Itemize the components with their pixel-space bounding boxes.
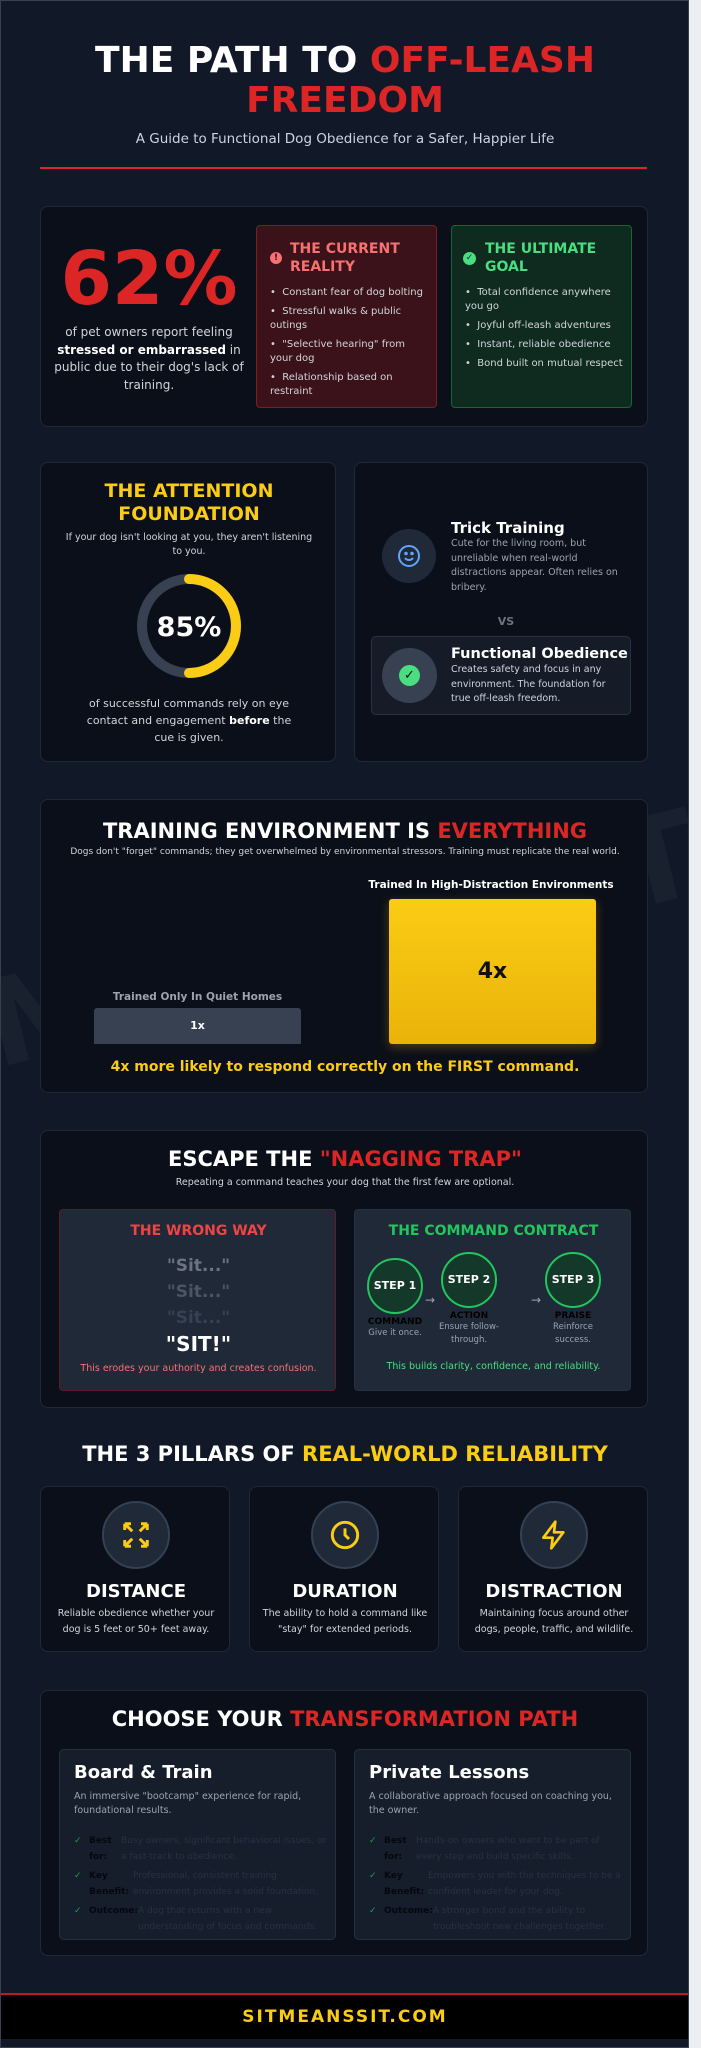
list: • Relationship based on restraint	[270, 372, 393, 397]
heading: THE CURRENT	[290, 241, 400, 257]
step 3: PRAISE	[555, 1311, 591, 1321]
list: A dog that returns with a new understanding of focus and commands.	[138, 1906, 317, 1932]
list: ✓	[74, 1906, 82, 1916]
trick training text: Cute for the living room, but unreliable when real-world distractions appear. Often relies on bribery.	[451, 538, 618, 592]
arrow: →	[531, 1293, 541, 1307]
stat description: of pet owners report feeling stressed or embarrassed in public due to their dog's lack of training.	[54, 325, 244, 392]
list: Key Benefit:	[89, 1871, 129, 1896]
list	[270, 287, 423, 397]
list: Outcome:	[384, 1906, 433, 1916]
chart: 85% ring: 85%	[157, 612, 221, 643]
caption: of successful commands rely on eye contact and engagement before the cue is given.	[87, 697, 291, 744]
list: • Stressful walks & public outings	[270, 306, 401, 331]
icon: alert	[270, 252, 282, 264]
list: • Total confidence anywhere you go	[465, 287, 611, 312]
box: command contract	[354, 1209, 631, 1391]
step 1: Give it once.	[368, 1328, 422, 1338]
panel: pillar distance	[40, 1486, 230, 1652]
box: ultimate goal	[451, 225, 632, 408]
list: ✓	[369, 1871, 377, 1881]
card: private lessons: Private Lessons	[369, 1762, 529, 1783]
list: Outcome:	[89, 1906, 138, 1916]
title: DURATION	[292, 1581, 398, 1602]
title: DISTRACTION	[485, 1581, 623, 1602]
box: current reality	[256, 225, 437, 408]
box: wrong way	[59, 1209, 336, 1391]
desc: The ability to hold a command like "stay" for extended periods.	[263, 1608, 427, 1635]
icon: check	[463, 252, 476, 265]
step 3: STEP 3	[552, 1273, 594, 1286]
panel: nagging trap	[40, 1130, 648, 1408]
list: ✓	[369, 1906, 377, 1916]
subtitle: A Guide to Functional Dog Obedience for a Safer, Happier Life	[136, 131, 554, 147]
list: ✓	[74, 1836, 82, 1846]
chart: 85% ring	[137, 574, 241, 678]
card: board & train	[59, 1749, 336, 1940]
functional text	[451, 646, 628, 704]
list: • Instant, reliable obedience	[465, 339, 610, 350]
subtext: If your dog isn't looking at you, they aren't listening to you.	[66, 532, 312, 557]
arrow: →	[425, 1293, 435, 1307]
list: • Joyful off-leash adventures	[465, 320, 611, 331]
step 3: Reinforce success.	[553, 1322, 593, 1345]
footer text: This builds clarity, confidence, and reliability.	[387, 1361, 600, 1372]
card: private lessons	[354, 1749, 631, 1940]
heading: THE ULTIMATE	[485, 241, 596, 257]
bar: 1x	[94, 1008, 301, 1044]
step 2	[439, 1252, 499, 1345]
repeated sits: "Sit..."	[167, 1282, 230, 1302]
step 1: COMMAND	[368, 1317, 422, 1327]
label: high distraction: Trained In High-Distraction Environments	[368, 879, 614, 891]
heading: REALITY	[290, 259, 355, 275]
title: THE PATH TO OFF-LEASH	[95, 40, 595, 81]
vs: VS	[498, 615, 514, 628]
desc: Maintaining focus around other dogs, people, traffic, and wildlife.	[475, 1608, 633, 1635]
step 2: Ensure follow-through.	[439, 1322, 499, 1345]
heading: GOAL	[485, 259, 528, 275]
bar: 4x	[389, 899, 596, 1044]
heading: CHOOSE YOUR TRANSFORMATION PATH	[112, 1707, 578, 1731]
panel: training environment	[40, 799, 648, 1093]
list	[74, 1836, 326, 1932]
icon: smiley	[382, 529, 436, 583]
panel: transformation path	[40, 1690, 648, 1956]
bar: 4x: 4x	[478, 959, 507, 984]
list: ✓	[369, 1836, 377, 1846]
list: • Constant fear of dog bolting	[270, 287, 423, 298]
heading: FOUNDATION	[118, 503, 260, 525]
heading: THE WRONG WAY	[130, 1223, 267, 1239]
list: Professional, consistent training environment provides a solid foundation.	[133, 1871, 318, 1896]
step 1	[367, 1258, 423, 1338]
panel: statistic	[40, 206, 648, 427]
trick training text: Trick Training	[451, 519, 565, 537]
title: DISTANCE	[86, 1581, 186, 1602]
list	[369, 1836, 621, 1932]
bar chart	[94, 879, 614, 1052]
list	[465, 287, 623, 369]
repeated sits	[166, 1256, 231, 1356]
label: quiet homes: Trained Only In Quiet Homes	[113, 991, 282, 1003]
heading	[104, 480, 274, 525]
list: • "Selective hearing" from your dog	[270, 339, 405, 364]
icon: bolt	[520, 1501, 588, 1569]
icon: check: ✓	[466, 253, 473, 263]
step 2: ACTION	[450, 1311, 488, 1321]
functional text: Functional Obedience	[451, 646, 628, 662]
card: board & train: An immersive "bootcamp" experience for rapid, foundational results.	[74, 1791, 301, 1816]
list: Best for:	[89, 1836, 112, 1862]
panel: attention foundation	[40, 462, 336, 762]
list: • Bond built on mutual respect	[465, 358, 623, 369]
heading: ESCAPE THE "NAGGING TRAP"	[168, 1147, 522, 1171]
card: board & train: Board & Train	[74, 1762, 213, 1783]
card: private lessons: A collaborative approach focused on coaching you, the owner.	[369, 1791, 612, 1816]
list: Empowers you with the techniques to be a confident leader for your dog.	[428, 1871, 621, 1896]
box: functional obedience	[371, 636, 631, 715]
icon: arrows	[102, 1501, 170, 1569]
panel: trick vs functional	[354, 462, 648, 762]
list: ✓	[74, 1871, 82, 1881]
subtext: Repeating a command teaches your dog that the first few are optional.	[176, 1177, 514, 1188]
repeated sits: "Sit..."	[167, 1256, 230, 1276]
footer	[1, 1993, 689, 2039]
icon: clock	[311, 1501, 379, 1569]
title	[95, 40, 595, 121]
functional text: Creates safety and focus in any environment. The foundation for true off-leash freedom.	[451, 664, 606, 704]
icon: check circle	[382, 648, 437, 703]
footer: SITMEANSSIT.COM	[242, 2007, 448, 2027]
heading: THE COMMAND CONTRACT	[389, 1223, 598, 1239]
heading	[290, 241, 400, 275]
heading: TRAINING ENVIRONMENT IS EVERYTHING	[103, 819, 587, 843]
step 3	[545, 1252, 601, 1345]
heading	[485, 241, 596, 275]
list: Busy owners, significant behavioral issues, or a fast-track to obedience.	[121, 1836, 326, 1862]
callout: 4x more likely to respond correctly on the FIRST command.	[111, 1059, 579, 1075]
step 1: STEP 1	[374, 1279, 416, 1292]
panel: pillar distraction	[458, 1486, 648, 1652]
footer text: This erodes your authority and creates confusion.	[80, 1363, 317, 1374]
step 2: STEP 2	[448, 1273, 490, 1286]
heading: THE ATTENTION	[104, 480, 274, 502]
bar: 1x: 1x	[190, 1019, 205, 1032]
list: A stronger bond and the ability to troubleshoot new challenges together.	[433, 1906, 606, 1932]
list: Hands-on owners who want to be part of every step and build specific skills.	[416, 1836, 600, 1862]
list: Best for:	[384, 1836, 407, 1862]
desc: Reliable obedience whether your dog is 5 feet or 50+ feet away.	[58, 1608, 214, 1635]
title: FREEDOM	[246, 80, 444, 121]
list: Key Benefit:	[384, 1871, 424, 1896]
repeated sits: "SIT!"	[166, 1332, 231, 1356]
panel: pillar duration	[249, 1486, 439, 1652]
repeated sits: "Sit..."	[167, 1308, 230, 1328]
heading: 3 pillars: THE 3 PILLARS OF REAL-WORLD RELIABILITY	[82, 1442, 608, 1466]
big stat 62%: 62%	[60, 236, 238, 322]
icon: check circle: ✓	[404, 668, 415, 683]
subtext: Dogs don't "forget" commands; they get overwhelmed by environmental stressors. Training must replicate the real world.	[70, 847, 620, 857]
icon: alert: !	[274, 253, 278, 263]
